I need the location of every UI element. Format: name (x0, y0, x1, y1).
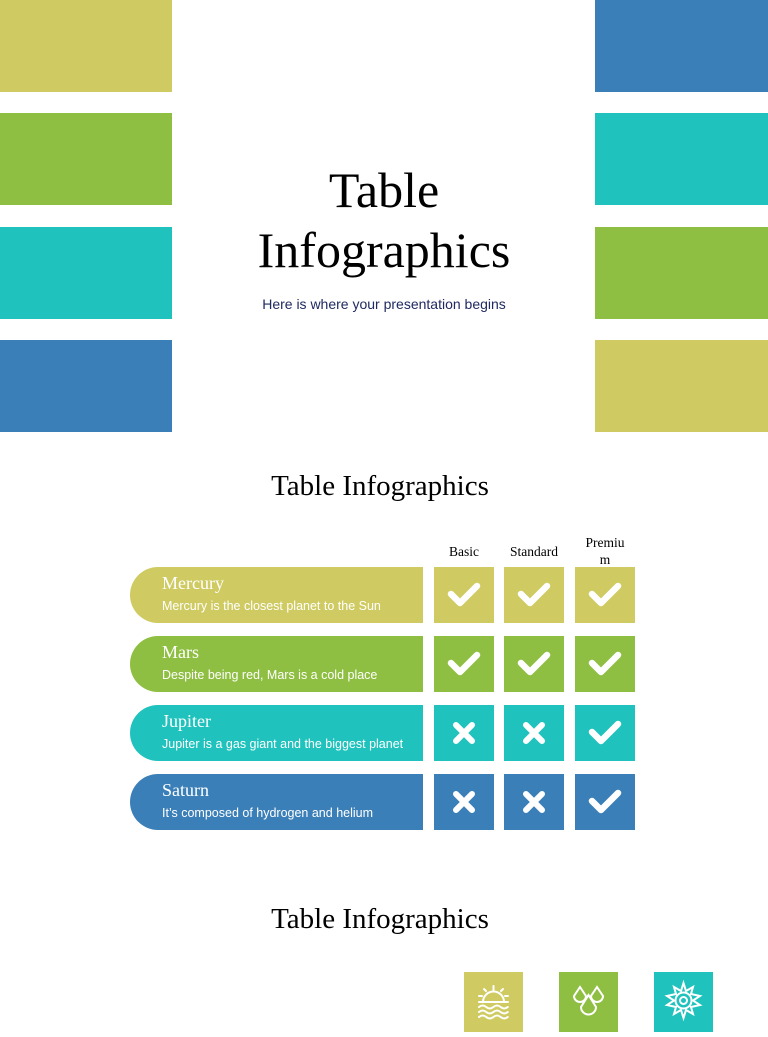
decorative block right 2 (595, 113, 768, 205)
row: Mercury: Mercury is the closest planet to the Sun (162, 599, 381, 613)
row: Saturn (130, 774, 423, 830)
header: Standard: Standard (510, 544, 558, 559)
row: Mercury (130, 567, 423, 623)
row: Mercury: Mercury (162, 573, 224, 593)
header: Basic: Basic (449, 544, 479, 559)
section heading 2: Table Infographics (271, 903, 489, 935)
section heading 1: Table Infographics (271, 470, 489, 502)
row: Mars: Mars (162, 642, 199, 662)
title: Infographics (258, 222, 510, 278)
icon: snowflake (654, 972, 713, 1032)
icon: sun over water (464, 972, 523, 1032)
icon: water drops (559, 972, 618, 1032)
decorative block left 2 (0, 113, 172, 205)
row: Jupiter: Jupiter is a gas giant and the biggest planet (162, 737, 403, 751)
decorative block left 3 (0, 227, 172, 319)
decorative block right 3 (595, 227, 768, 319)
decorative block right 1 (595, 0, 768, 92)
row: Mars (130, 636, 423, 692)
subtitle: Here is where your presentation begins (262, 296, 506, 312)
header: Premium (586, 535, 624, 567)
row: Mars: Despite being red, Mars is a cold place (162, 668, 377, 682)
decorative block left 1 (0, 0, 172, 92)
header: Premium: m (600, 552, 610, 567)
title: Table (329, 162, 439, 218)
decorative block right 4 (595, 340, 768, 432)
header: Premium: Premiu (586, 535, 624, 550)
title (258, 162, 510, 278)
row: Saturn: It’s composed of hydrogen and helium (162, 806, 373, 820)
row: Jupiter: Jupiter (162, 711, 211, 731)
row: Saturn: Saturn (162, 780, 209, 800)
decorative block left 4 (0, 340, 172, 432)
row: Jupiter (130, 705, 423, 761)
